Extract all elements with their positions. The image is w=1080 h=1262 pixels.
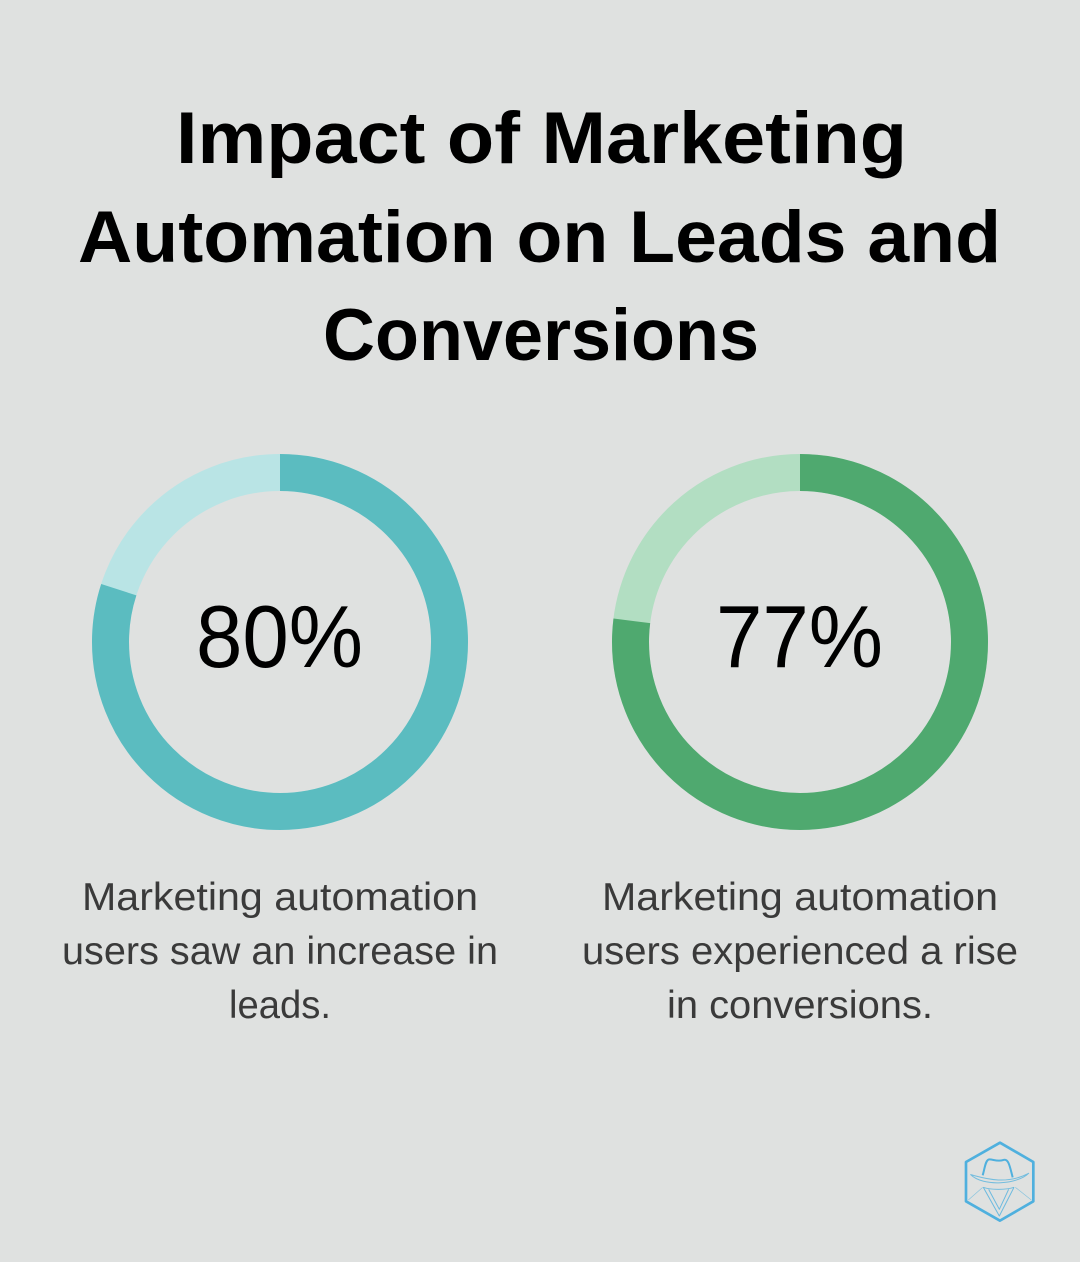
panel: conversions statistic [582,472,1018,1027]
panel: leads statistic [62,472,498,1027]
title [78,98,1001,376]
description: leads [62,876,498,1027]
description: conversions: users experienced a rise [582,930,1018,973]
value: 80%: 80% [196,587,363,686]
value: 77%: 77% [716,587,883,686]
description: leads: leads. [229,984,331,1027]
donut chart: 77% [630,472,970,812]
description: conversions [582,876,1018,1027]
description: leads: Marketing automation [82,876,478,919]
description: conversions: in conversions. [667,984,933,1027]
description: leads: users saw an increase in [62,930,498,973]
title: Conversions [323,295,759,376]
icon: hexagon logo with hat [966,1143,1033,1221]
title: Impact of Marketing [176,98,907,179]
description: conversions: Marketing automation [602,876,998,919]
title: Automation on Leads and [78,197,1001,278]
donut chart: 80% [110,472,450,812]
